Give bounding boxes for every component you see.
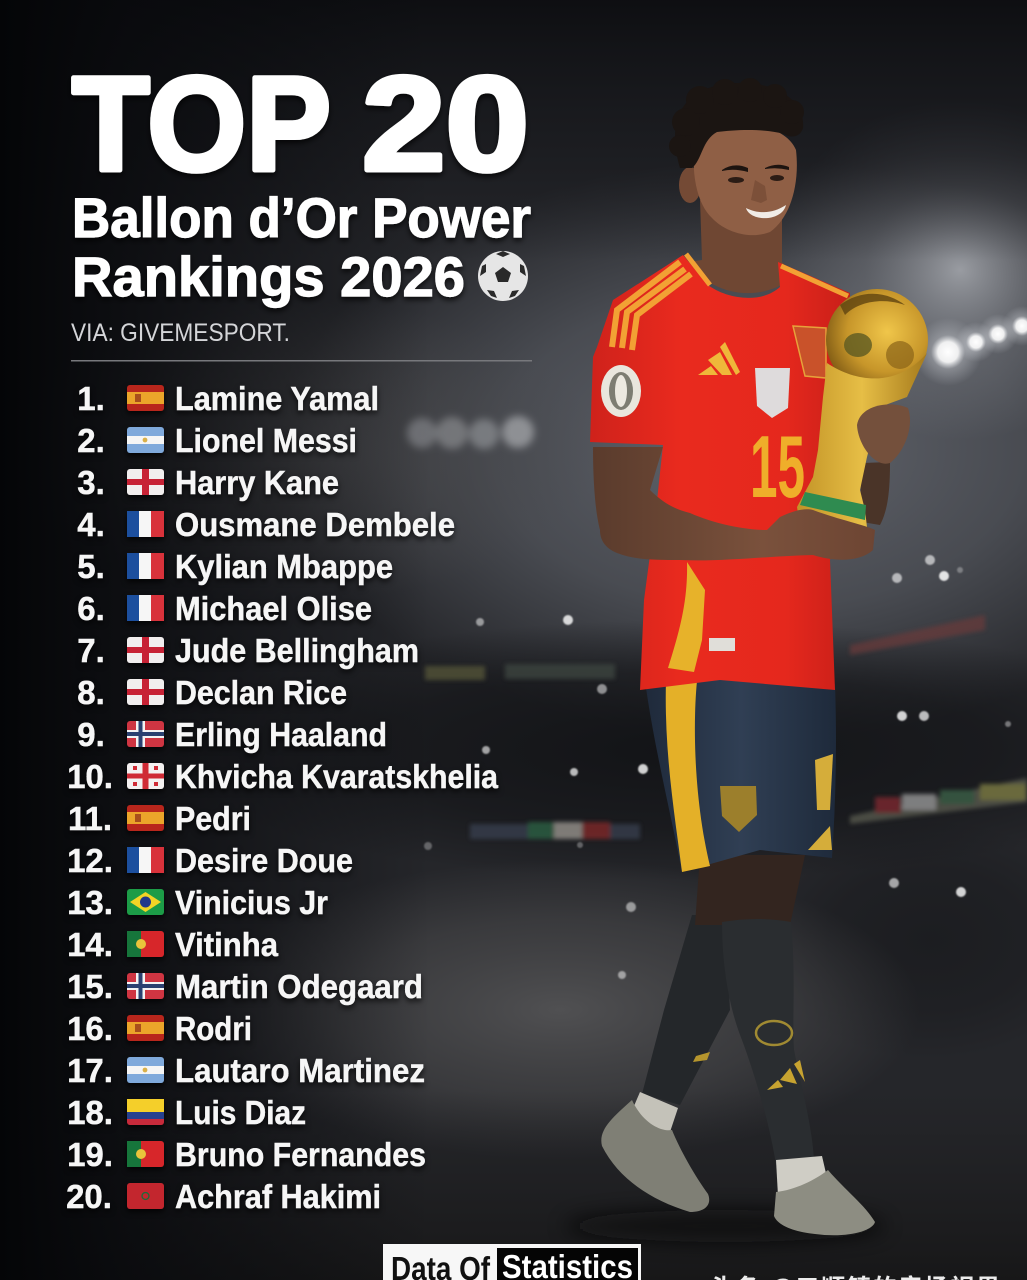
player back leg: [601, 915, 730, 1212]
rank 2: Lionel Messi: [175, 422, 357, 459]
rank 1: Lamine Yamal: [175, 380, 379, 417]
heading: top 20: [72, 50, 529, 199]
rank 6: 6.: [77, 590, 105, 627]
rank 16: Rodri: [175, 1010, 252, 1047]
rank 16: [67, 1010, 252, 1047]
heading: year: Rankings 2026: [72, 245, 465, 308]
player near arm: [593, 447, 875, 560]
player illustration: [565, 78, 928, 1242]
rank 17: [67, 1052, 425, 1089]
rank 20: [66, 1178, 381, 1215]
shirt number: 15: [750, 417, 805, 516]
rank 17: 17.: [67, 1052, 113, 1089]
player shorts: [646, 672, 836, 872]
rank 13: Vinicius Jr: [175, 884, 328, 921]
spain crest: [793, 326, 826, 378]
rank 1: [77, 380, 379, 417]
trophy: [797, 289, 928, 538]
rank 9: Erling Haaland: [175, 716, 387, 753]
heading: top 20: 20: [362, 50, 529, 199]
heading: power rankings: Ballon d’Or Power: [72, 186, 531, 249]
rank 3: [77, 464, 339, 501]
hair: [669, 78, 804, 168]
rank 20: Achraf Hakimi: [175, 1178, 381, 1215]
source credit: VIA: GIVEMESPORT.: [71, 319, 290, 347]
player thighs: [695, 855, 805, 925]
sleeve badge: [601, 365, 641, 417]
rank 18: [67, 1094, 306, 1131]
rank 8: Declan Rice: [175, 674, 347, 711]
rank 9: [77, 716, 387, 753]
player far arm: [861, 462, 890, 525]
rank 5: 5.: [77, 548, 105, 585]
rank 7: Jude Bellingham: [175, 632, 419, 669]
heading: top 20: TOP: [72, 50, 331, 199]
rank 14: Vitinha: [175, 926, 279, 963]
rank 5: Kylian Mbappe: [175, 548, 393, 585]
stadium banners and lights: [407, 306, 1027, 979]
shirt label: [709, 638, 735, 651]
rank 13: 13.: [67, 884, 113, 921]
jersey side stripe: [668, 562, 705, 672]
rank 11: Pedri: [175, 800, 251, 837]
rank 15: [67, 968, 423, 1005]
rank 3: 3.: [77, 464, 105, 501]
title: [72, 50, 531, 308]
rank 14: [67, 926, 279, 963]
rank 5: [77, 548, 393, 585]
data of statistics badge: [383, 1244, 641, 1280]
rank 8: 8.: [77, 674, 105, 711]
ranking list: [66, 380, 499, 1215]
rank 7: 7.: [77, 632, 105, 669]
rank 6: Michael Olise: [175, 590, 372, 627]
rank 15: 15.: [67, 968, 113, 1005]
rank 8: [77, 674, 347, 711]
adidas logo: [698, 342, 740, 375]
player hand on trophy: [857, 404, 910, 464]
rank 4: 4.: [77, 506, 105, 543]
rank 11: [68, 800, 251, 837]
ground shadow: [565, 1210, 885, 1242]
rank 10: 10.: [67, 758, 113, 795]
rank 13: [67, 884, 328, 921]
rank 7: [77, 632, 419, 669]
icon: football: [478, 251, 528, 301]
rank 4: Ousmane Dembele: [175, 506, 455, 543]
chest badge: [755, 368, 790, 418]
rank 19: 19.: [67, 1136, 113, 1173]
player jersey: [590, 254, 850, 690]
rank 6: [77, 590, 372, 627]
rank 9: 9.: [77, 716, 105, 753]
rank 12: [67, 842, 353, 879]
rank 19: Bruno Fernandes: [175, 1136, 426, 1173]
rank 1: 1.: [77, 380, 105, 417]
player head and neck: [669, 78, 804, 293]
player front leg: [722, 919, 875, 1235]
rank 16: 16.: [67, 1010, 113, 1047]
trophy globe: [826, 289, 928, 391]
rank 12: 12.: [67, 842, 113, 879]
rank 14: 14.: [67, 926, 113, 963]
rank 11: 11.: [68, 800, 112, 837]
rank 12: Desire Doue: [175, 842, 353, 879]
crest on shorts: [720, 786, 757, 832]
rank 3: Harry Kane: [175, 464, 339, 501]
rank 2: 2.: [77, 422, 105, 459]
rank 15: Martin Odegaard: [175, 968, 423, 1005]
rank 2: [77, 422, 357, 459]
rank 10: Khvicha Kvaratskhelia: [175, 758, 499, 795]
rank 19: [67, 1136, 426, 1173]
rank 17: Lautaro Martinez: [175, 1052, 425, 1089]
rank 18: Luis Diaz: [175, 1094, 306, 1131]
rank 20: 20.: [66, 1178, 112, 1215]
rank 18: 18.: [67, 1094, 113, 1131]
